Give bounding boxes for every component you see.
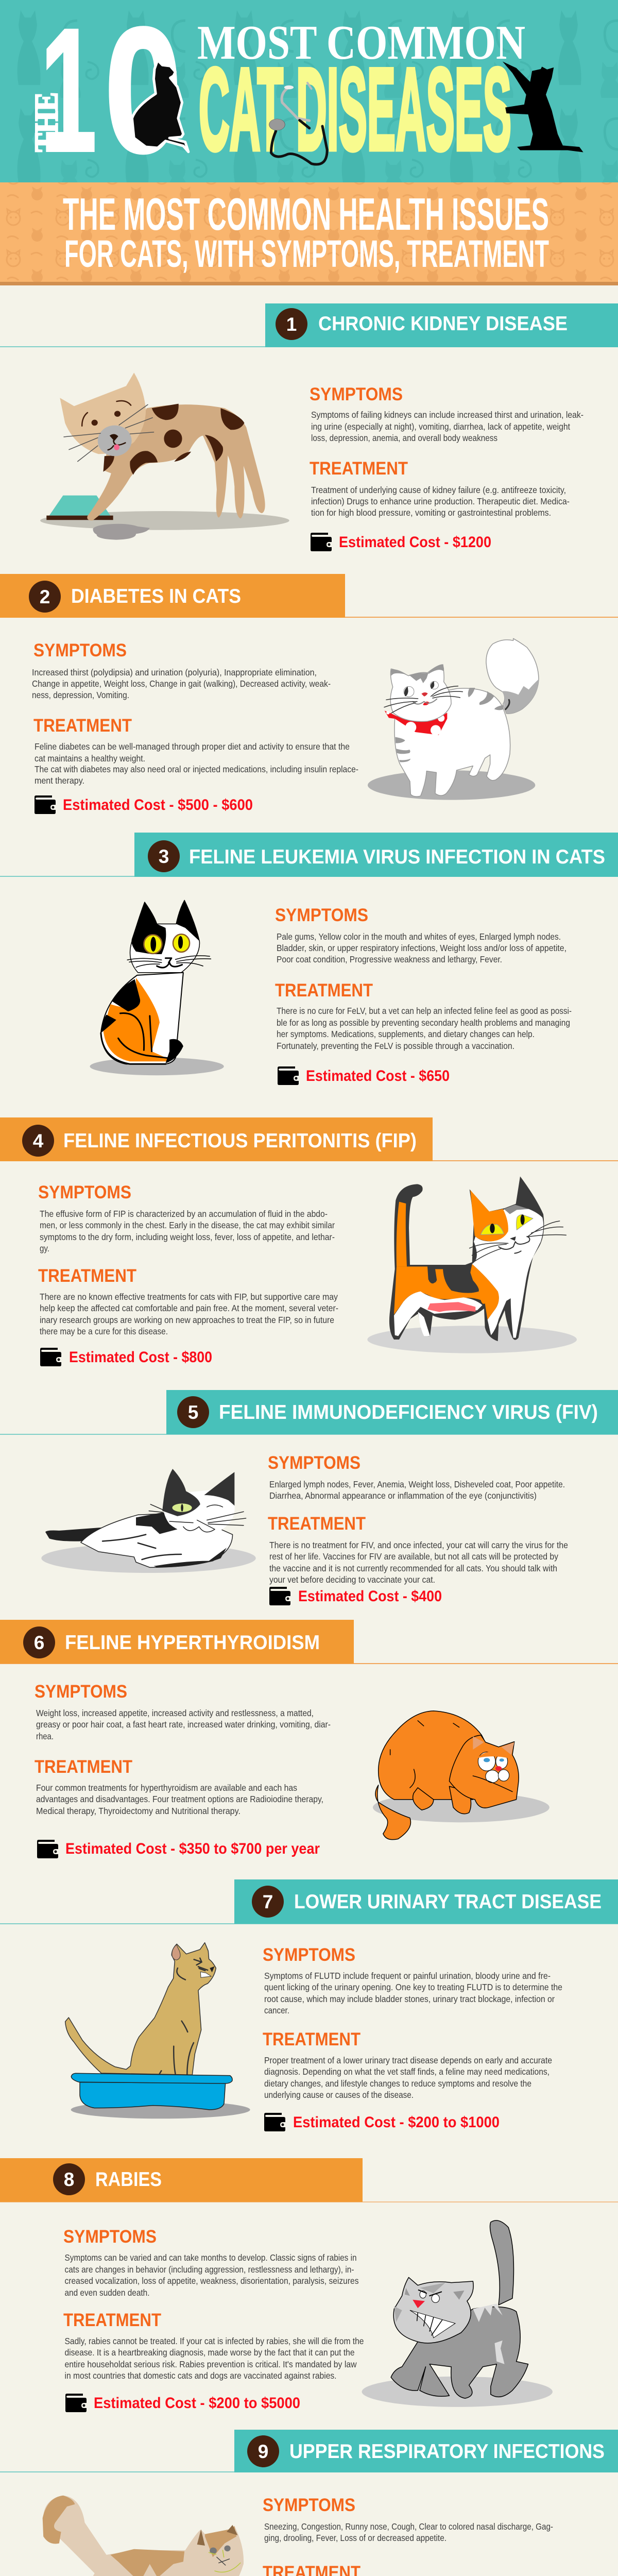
symptoms text: greasy or poor hair coat, a fast heart rate, increased water drinking, vomiting, diar-: [36, 1719, 331, 1730]
subtitle band: [0, 182, 618, 285]
treatment text: help keep the affected cat comfortable and pain free. At the moment, several veter-: [40, 1303, 338, 1313]
symptoms text: The effusive form of FIP is characterized by an accumulation of fluid in the abdo-: [40, 1209, 328, 1219]
treatment heading: TREATMENT: [310, 459, 408, 479]
treatment text: your vet before deciding to vaccinate your cat.: [269, 1574, 435, 1585]
banner 4: FELINE INFECTIOUS PERITONITIS (FIP): [63, 1130, 417, 1152]
symptoms heading: SYMPTOMS: [63, 2227, 157, 2247]
symptoms text: Change in appetite, Weight loss, Change in gait (walking), Decreased activity, weak-: [32, 679, 331, 689]
estimated cost: Estimated Cost - $200 to $1000: [293, 2114, 500, 2131]
banner 6: FELINE HYPERTHYROIDISM: [65, 1632, 320, 1654]
banner 6: 6: [34, 1632, 44, 1653]
subtitle text: [63, 189, 549, 275]
banner 8: 8: [64, 2169, 74, 2190]
banner 3: 3: [159, 846, 169, 867]
symptoms text: cats are changes in behavior (including aggression, restlessness and lethargy), in-: [65, 2264, 354, 2275]
illustration: fat orange cat: [373, 1711, 550, 1840]
treatment text: Proper treatment of a lower urinary tract disease depends on early and accurate: [264, 2055, 552, 2065]
illustration: sick spotted cat with bowl: [40, 372, 289, 540]
symptoms text: gy.: [40, 1243, 49, 1253]
banner 5: 5: [188, 1402, 198, 1423]
treatment text: Medical therapy, Thyroidectomy and Nutritional therapy.: [36, 1806, 241, 1816]
symptoms text: Symptoms can be varied and can take months to develop. Classic signs of rabies in: [65, 2252, 356, 2263]
treatment heading: TREATMENT: [268, 1514, 366, 1534]
treatment heading: TREATMENT: [63, 2310, 161, 2330]
panel: feline infectious peritonitis: [0, 1117, 618, 1366]
symptoms text: ness, depression, Vomiting.: [32, 690, 129, 700]
title: The 10: THE: [28, 92, 64, 152]
treatment text: infection) Drugs to enhance urine production. Therapeutic diet. Medica-: [311, 496, 570, 506]
treatment text: Treatment of underlying cause of kidney failure (e.g. antifreeze toxicity,: [311, 485, 566, 495]
illustration: black and white cat lying down: [41, 1469, 256, 1573]
treatment text: ment therapy.: [35, 775, 84, 786]
illustration: cat in litter box: [65, 1943, 250, 2119]
header panel: [0, 0, 618, 189]
estimated cost: Estimated Cost - $650: [306, 1067, 450, 1084]
banner 5: FELINE IMMUNODEFICIENCY VIRUS (FIV): [219, 1401, 598, 1423]
treatment text: [35, 741, 358, 786]
symptoms heading: SYMPTOMS: [310, 384, 403, 404]
treatment text: [36, 1783, 323, 1816]
estimated cost: Estimated Cost - $350 to $700 per year: [65, 1840, 320, 1857]
symptoms text: root cause, which may include bladder stones, urinary tract blockage, infection or: [264, 1994, 555, 2004]
symptoms text: [311, 410, 583, 443]
symptoms heading: SYMPTOMS: [38, 1182, 131, 1202]
treatment text: [269, 1540, 568, 1585]
title: Cat Diseases: CAT: [199, 44, 283, 174]
symptoms text: ging, drooling, Fever, Loss of or decreased appetite.: [264, 2533, 447, 2543]
treatment text: underlying cause or causes of the disease.: [264, 2090, 414, 2100]
symptoms text: [264, 2521, 553, 2543]
banner 7: [0, 1879, 618, 1924]
treatment text: rest of her life. Vaccines for FIV are available, but not all cats will be protected by: [269, 1551, 558, 1562]
treatment text: advantages and disadvantages. Four treatment options are Radioiodine therapy,: [36, 1794, 323, 1804]
symptoms heading: SYMPTOMS: [275, 905, 368, 925]
icon: cat silhouettes and stethoscope: [132, 60, 583, 164]
symptoms text: [277, 931, 566, 964]
estimated cost: [40, 1348, 212, 1366]
symptoms heading: SYMPTOMS: [263, 1945, 355, 1965]
treatment heading: TREATMENT: [275, 980, 373, 1001]
treatment text: in most countries that domestic cats and dogs are vaccinated against rabies.: [65, 2370, 337, 2381]
symptoms text: Symptoms of failing kidneys can include increased thirst and urination, leak-: [311, 410, 583, 420]
banner 2: DIABETES IN CATS: [71, 585, 241, 607]
illustration: white cat with red bandana: [368, 638, 539, 800]
panel: rabies: [0, 2158, 618, 2412]
treatment text: [311, 485, 570, 518]
banner 4: [0, 1117, 618, 1161]
treatment text: disease. It is a heartbreaking diagnosis, made worse by the fact that it can put the: [65, 2347, 354, 2358]
symptoms text: Sneezing, Congestion, Runny nose, Cough, Clear to colored nasal discharge, Gag-: [264, 2521, 553, 2532]
symptoms text: [40, 1209, 335, 1253]
treatment text: There is no treatment for FIV, and once infected, your cat will carry the virus for the: [269, 1540, 568, 1550]
symptoms text: Poor coat condition, Progressive weakness and lethargy, Fever.: [277, 954, 502, 964]
title: Most Common: MOST COMMON: [197, 16, 525, 70]
symptoms text: Pale gums, Yellow color in the mouth and whites of eyes, Enlarged lymph nodes.: [277, 931, 561, 942]
banner 6: [0, 1620, 618, 1664]
title: The 10: [28, 0, 181, 189]
symptoms heading: SYMPTOMS: [33, 640, 127, 660]
treatment text: Sadly, rabies cannot be treated. If your cat is infected by rabies, she will die from the: [65, 2336, 364, 2346]
panel: feline hyperthyroidism: [0, 1620, 618, 1858]
panel: feline leukemia: [0, 833, 618, 1085]
treatment text: dietary changes, and lifestyle changes to reduce symptoms and resolve the: [264, 2078, 531, 2089]
symptoms text: [269, 1479, 565, 1501]
banner 1: [0, 303, 618, 347]
banner 8: RABIES: [95, 2168, 162, 2191]
treatment text: her symptoms. Medications, supplements, and dietary changes can help.: [277, 1029, 535, 1039]
treatment text: Fortunately, preventing the FeLV is possible through a vaccination.: [277, 1041, 514, 1051]
symptoms text: men, or less commonly in the chest. Early in the disease, the cat may exhibit similar: [40, 1220, 335, 1230]
panel: upper respiratory infections: [0, 2430, 618, 2576]
panel: diabetes in cats: [0, 574, 618, 814]
symptoms text: Bladder, skin, or upper respiratory infections, Weight loss and/or loss of appetite,: [277, 943, 566, 953]
symptoms heading: SYMPTOMS: [268, 1453, 360, 1473]
illustration: angry grey cat: [362, 2221, 553, 2407]
banner 5: [0, 1390, 618, 1435]
symptoms text: quent licking of the urinary opening. One key to treating FLUTD is to determine the: [264, 1982, 562, 1992]
panel: chronic kidney disease: [0, 303, 618, 551]
treatment heading: TREATMENT: [35, 1757, 132, 1777]
symptoms text: and even sudden death.: [65, 2287, 149, 2298]
symptoms text: [36, 1708, 331, 1741]
treatment text: Four common treatments for hyperthyroidism are available and each has: [36, 1783, 297, 1793]
banner 1: CHRONIC KIDNEY DISEASE: [318, 313, 568, 335]
treatment text: the vaccine and it is not currently recommended for all cats. You should talk with: [269, 1563, 557, 1573]
symptoms text: [65, 2252, 359, 2298]
treatment text: ble for as long as possible by preventing secondary health problems and managing: [277, 1018, 570, 1028]
estimated cost: Estimated Cost - $1200: [339, 534, 491, 551]
symptoms text: cancer.: [264, 2005, 289, 2015]
symptoms text: loss, depression, anemia, and overall body weakness: [311, 433, 497, 443]
symptoms text: Weight loss, increased appetite, increased activity and restlessness, a matted,: [36, 1708, 314, 1718]
symptoms text: symptoms to the dry form, including weight loss, fever, loss of appetite, and lethar-: [40, 1232, 335, 1242]
treatment text: entire householdat serious risk. Rabies prevention is critical. It's mandated by law: [65, 2359, 357, 2369]
symptoms text: Diarrhea, Abnormal appearance or inflammation of the eye (conjunctivitis): [269, 1490, 537, 1501]
banner 9: [0, 2430, 618, 2472]
treatment text: there may be a cure for this disease.: [40, 1326, 168, 1336]
treatment heading: TREATMENT: [33, 716, 132, 736]
illustration: long-haired tan cat: [43, 2496, 246, 2576]
illustration: calico cat sitting: [90, 900, 224, 1075]
banner 4: 4: [33, 1130, 44, 1151]
banner 1: 1: [286, 314, 297, 335]
treatment text: Feline diabetes can be well-managed through proper diet and activity to ensure that the: [35, 741, 350, 752]
treatment text: inary research groups are working on new approaches to treat the FIP, so in future: [40, 1315, 334, 1325]
symptoms text: creased vocalization, loss of appetite, weakness, disorientation, paralysis, seizures: [65, 2276, 359, 2286]
symptoms text: rhea.: [36, 1731, 54, 1741]
treatment text: There are no known effective treatments for cats with FIP, but supportive care may: [40, 1292, 338, 1302]
banner 9: 9: [258, 2441, 268, 2462]
symptoms text: Symptoms of FLUTD include frequent or painful urination, bloody urine and fre-: [264, 1971, 551, 1981]
treatment text: [40, 1292, 338, 1336]
panel: feline immunodeficiency virus: [0, 1390, 618, 1605]
estimated cost: Estimated Cost - $800: [69, 1349, 212, 1366]
treatment text: [264, 2055, 552, 2100]
estimated cost: Estimated Cost - $400: [298, 1588, 442, 1605]
treatment text: The cat with diabetes may also need oral or injected medications, including insulin replace-: [35, 764, 358, 774]
treatment text: [277, 1006, 572, 1051]
symptoms heading: SYMPTOMS: [263, 2495, 355, 2515]
banner 7: 7: [263, 1891, 273, 1912]
symptoms text: [32, 667, 331, 700]
banner 3: [0, 833, 618, 877]
estimated cost: Estimated Cost - $500 - $600: [63, 796, 253, 814]
symptoms heading: SYMPTOMS: [35, 1682, 127, 1702]
treatment heading: TREATMENT: [263, 2029, 360, 2049]
illustration: calico cat standing: [367, 1176, 577, 1353]
panel: lower urinary tract disease: [0, 1879, 618, 2131]
symptoms text: Enlarged lymph nodes, Fever, Anemia, Weight loss, Disheveled coat, Poor appetite.: [269, 1479, 565, 1489]
treatment text: cat maintains a healthy weight.: [35, 753, 145, 764]
treatment heading: TREATMENT: [38, 1266, 136, 1286]
treatment text: [65, 2336, 364, 2381]
banner 8: [0, 2158, 618, 2202]
estimated cost: Estimated Cost - $200 to $5000: [94, 2395, 300, 2412]
banner 2: [0, 574, 618, 618]
treatment text: diagnosis. Depending on what the vet staff finds, a feline may need medications,: [264, 2066, 550, 2077]
treatment text: tion for high blood pressure, vomiting or gastrointestinal problems.: [311, 507, 551, 518]
symptoms text: [264, 1971, 562, 2015]
treatment text: There is no cure for FeLV, but a vet can help an infected feline feel as good as possi-: [277, 1006, 572, 1016]
banner 2: 2: [40, 586, 50, 607]
symptoms text: Increased thirst (polydipsia) and urination (polyuria), Inappropriate elimination,: [32, 667, 317, 677]
symptoms text: ing urine (especially at night), vomiting, diarrhea, lack of appetite, weight: [311, 421, 570, 432]
